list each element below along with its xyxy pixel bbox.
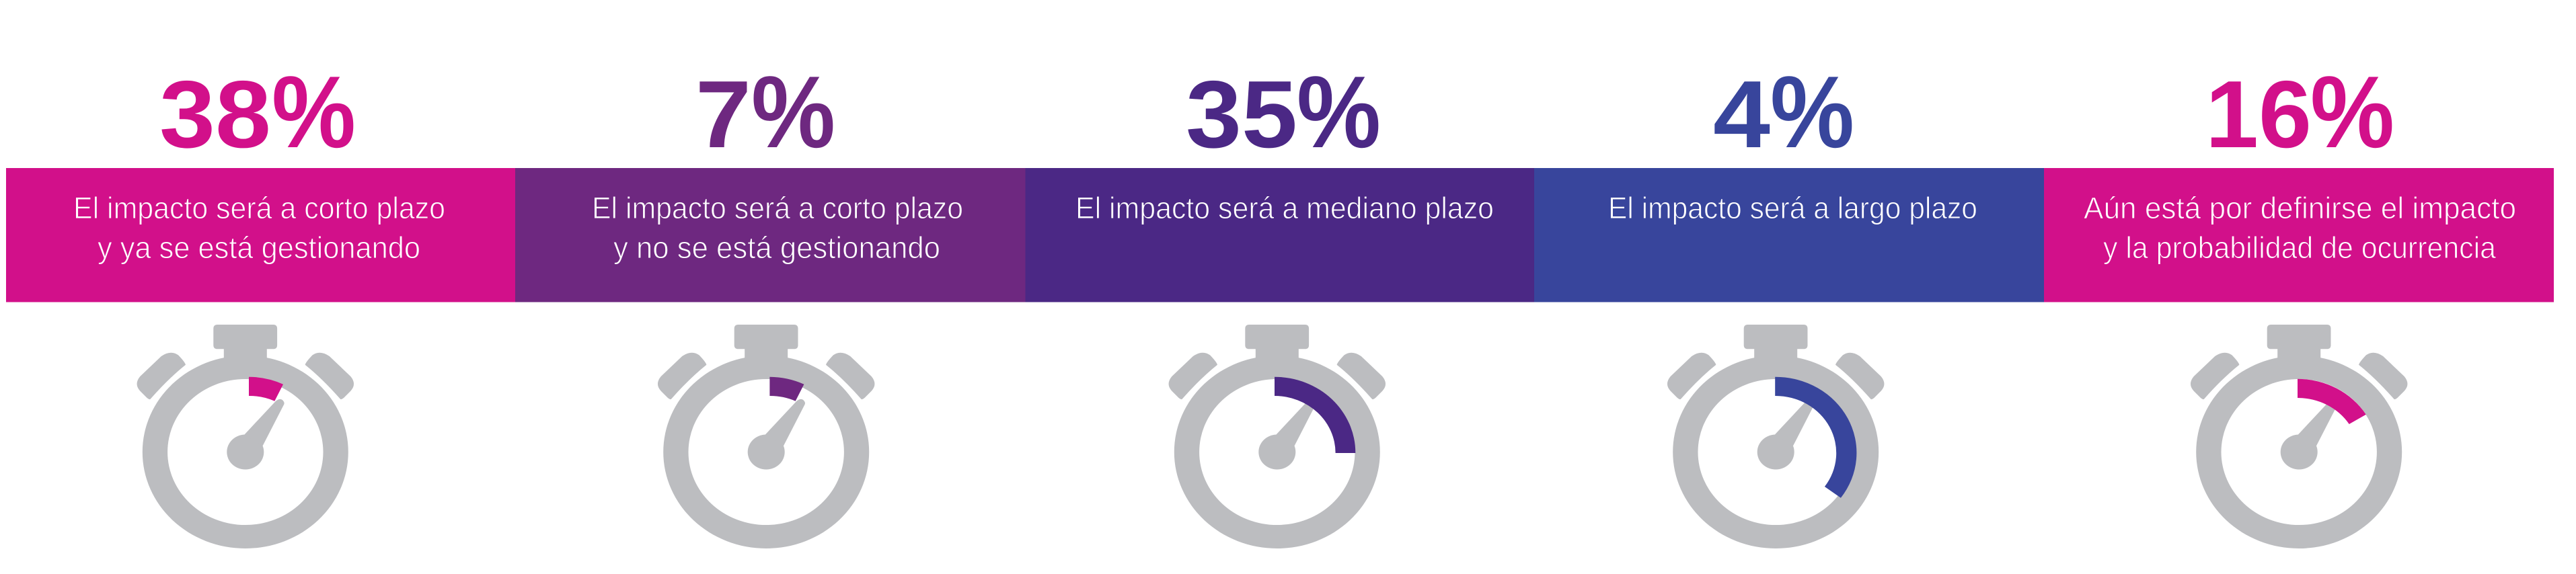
percentage: 4%: % bbox=[1770, 55, 1854, 169]
percentage: 4% bbox=[1713, 55, 1854, 169]
band: magenta label bbox=[6, 168, 515, 302]
column: 16% undefined bbox=[2044, 55, 2554, 548]
percentage: 16%: % bbox=[2310, 55, 2394, 169]
band: purple label: y no se está gestionando bbox=[613, 231, 940, 265]
percentage: 4%: 4 bbox=[1713, 61, 1770, 168]
column: 35% medium term bbox=[1025, 55, 1534, 548]
column: 4% long term bbox=[1534, 55, 2044, 548]
icon: stopwatch with medium magenta arc bbox=[2191, 325, 2407, 548]
percentage: 16%: 16 bbox=[2205, 61, 2312, 168]
band: dark purple label bbox=[1025, 168, 1534, 302]
band: dark purple label: El impacto será a mediano plazo bbox=[1075, 191, 1494, 225]
column: 7% short term, not managed bbox=[515, 55, 1025, 548]
percentage: 16% bbox=[2205, 55, 2394, 169]
percentage: 38% bbox=[159, 55, 356, 169]
band: magenta label: El impacto será a corto plazo bbox=[73, 191, 445, 225]
band: magenta label: y ya se está gestionando bbox=[98, 231, 420, 265]
percentage: 38%: % bbox=[272, 55, 356, 169]
icon: stopwatch with short purple arc bbox=[658, 325, 874, 548]
column: 38% short term, managed bbox=[6, 55, 515, 548]
percentage: 7% bbox=[695, 55, 835, 169]
band: magenta label: y la probabilidad de ocurrencia bbox=[2103, 231, 2497, 265]
band: purple label bbox=[515, 168, 1025, 302]
band: purple label: El impacto será a corto plazo bbox=[592, 191, 963, 225]
percentage: 35%: % bbox=[1297, 55, 1381, 169]
icon: stopwatch with quarter dark purple arc bbox=[1169, 325, 1386, 548]
band: magenta label bbox=[2044, 168, 2554, 302]
icon: stopwatch with long blue arc bbox=[1667, 325, 1884, 548]
band: blue label: El impacto será a largo plazo bbox=[1608, 191, 1977, 225]
band: magenta label: Aún está por definirse el impacto bbox=[2084, 191, 2516, 225]
percentage: 38%: 38 bbox=[159, 61, 271, 168]
percentage: 7%: % bbox=[751, 55, 835, 169]
percentage: 35%: 35 bbox=[1186, 61, 1297, 168]
percentage: 35% bbox=[1186, 55, 1381, 169]
band: blue label bbox=[1534, 168, 2044, 302]
percentage: 7%: 7 bbox=[695, 61, 751, 168]
icon: stopwatch with short magenta arc bbox=[137, 325, 354, 548]
